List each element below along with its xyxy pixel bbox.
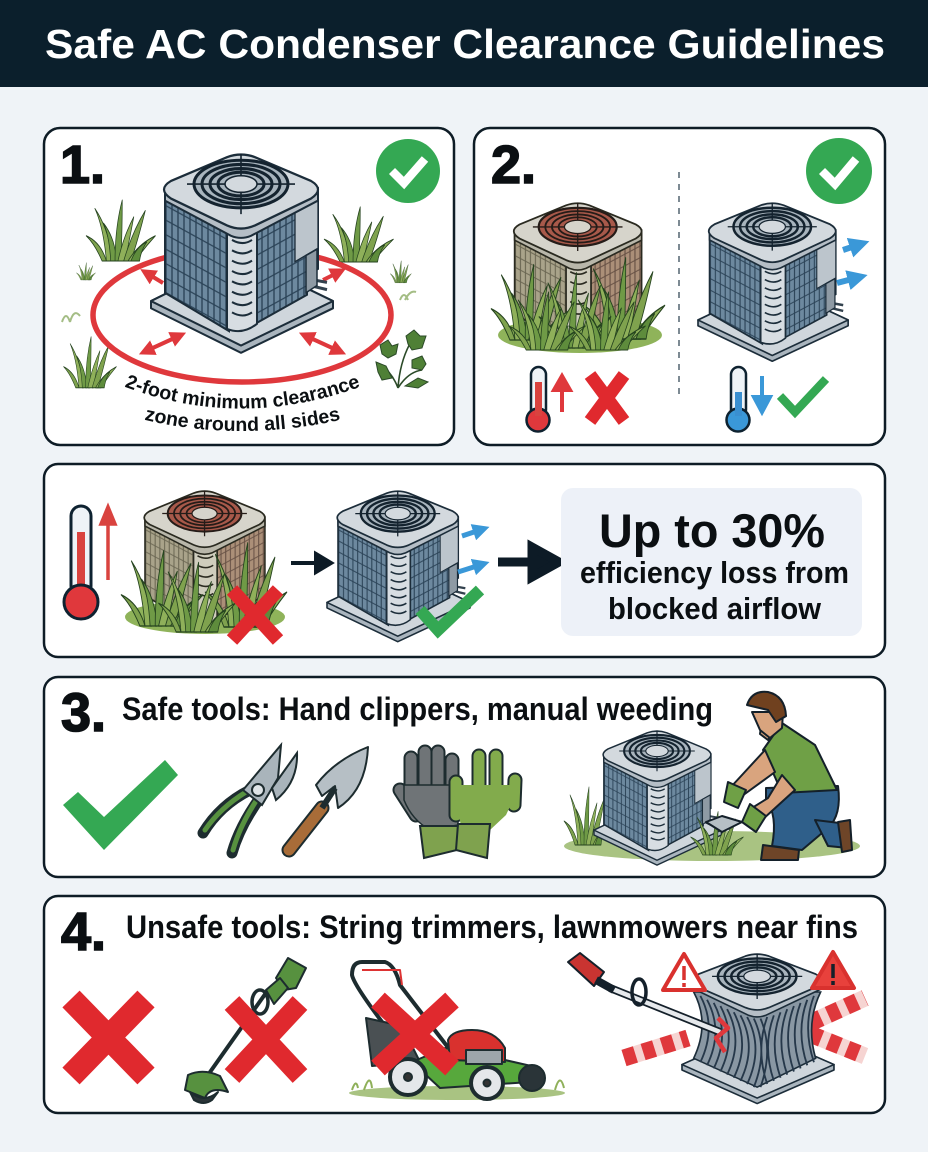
hot thermometer bbox=[526, 367, 550, 432]
panel 3: safe tools bbox=[44, 677, 885, 877]
big red X bbox=[71, 999, 146, 1076]
red up arrow bbox=[101, 507, 115, 580]
green tick bbox=[780, 379, 826, 412]
warped AC unit bbox=[682, 954, 834, 1104]
title banner bbox=[0, 0, 928, 87]
step number 2: 2. bbox=[491, 135, 536, 195]
title banner: Safe AC Condenser Clearance Guidelines bbox=[45, 21, 885, 67]
icon: green check badge bbox=[376, 139, 440, 203]
curved clearance caption: zone around all sides bbox=[144, 410, 340, 431]
panel 2: blocked vs clear bbox=[474, 128, 885, 445]
callout: efficiency loss bbox=[561, 488, 862, 636]
grass tufts bbox=[62, 200, 416, 388]
panel 1: clearance zone bbox=[42, 126, 456, 446]
hot thermometer bbox=[64, 506, 98, 619]
overgrown AC unit bbox=[121, 491, 287, 634]
airflow arrows bbox=[837, 245, 858, 283]
red X bbox=[590, 375, 624, 421]
icon: hand pruners bbox=[203, 745, 297, 853]
red up arrow bbox=[554, 376, 570, 412]
panel: efficiency loss bbox=[44, 464, 885, 657]
cold thermometer bbox=[726, 367, 750, 432]
red clearance ring bbox=[93, 248, 391, 382]
curved clearance caption bbox=[124, 375, 360, 431]
green tick bbox=[420, 590, 480, 630]
red hazard tape bbox=[624, 998, 865, 1058]
icon: work gloves bbox=[400, 752, 520, 858]
scene: damaged AC with warning bbox=[568, 952, 865, 1104]
icon: lawnmower bbox=[349, 962, 565, 1100]
red X bbox=[232, 590, 278, 640]
icon: green check badge bbox=[806, 138, 872, 204]
callout: efficiency loss: Up to 30% bbox=[599, 504, 825, 557]
small arrow bbox=[291, 554, 331, 572]
heading: safe tools: Safe tools: Hand clippers, manual weeding bbox=[122, 691, 713, 727]
callout: efficiency loss: efficiency loss from bbox=[580, 555, 849, 590]
weed plant bbox=[376, 330, 428, 388]
step number 4: 4. bbox=[61, 902, 106, 962]
icon: string trimmer bbox=[185, 958, 306, 1103]
big arrow bbox=[498, 547, 559, 577]
warning triangles bbox=[663, 952, 854, 990]
icon: hand trowel bbox=[289, 747, 368, 850]
clean AC unit bbox=[327, 491, 470, 642]
big green check bbox=[63, 760, 178, 850]
gardener bbox=[706, 692, 852, 860]
clean AC unit bbox=[698, 203, 848, 361]
clearance arrows bbox=[144, 271, 341, 352]
step number 1: 1. bbox=[60, 135, 105, 195]
curved clearance caption: 2-foot minimum clearance bbox=[124, 375, 360, 409]
step number 3: 3. bbox=[61, 683, 106, 743]
red X over mower bbox=[378, 1000, 452, 1068]
red X over trimmer bbox=[232, 1003, 300, 1076]
panel 4: unsafe tools bbox=[44, 896, 885, 1113]
heading: unsafe tools: Unsafe tools: String trimmers, lawnmowers near fins bbox=[126, 909, 858, 945]
airflow arrows bbox=[458, 530, 480, 572]
blue down arrow bbox=[754, 376, 770, 412]
scene: gardener weeding by AC bbox=[564, 692, 860, 865]
overgrown AC unit bbox=[491, 203, 665, 353]
AC condenser unit bbox=[151, 154, 333, 353]
string trimmer strike bbox=[568, 953, 728, 1052]
callout: efficiency loss: blocked airflow bbox=[608, 591, 822, 626]
